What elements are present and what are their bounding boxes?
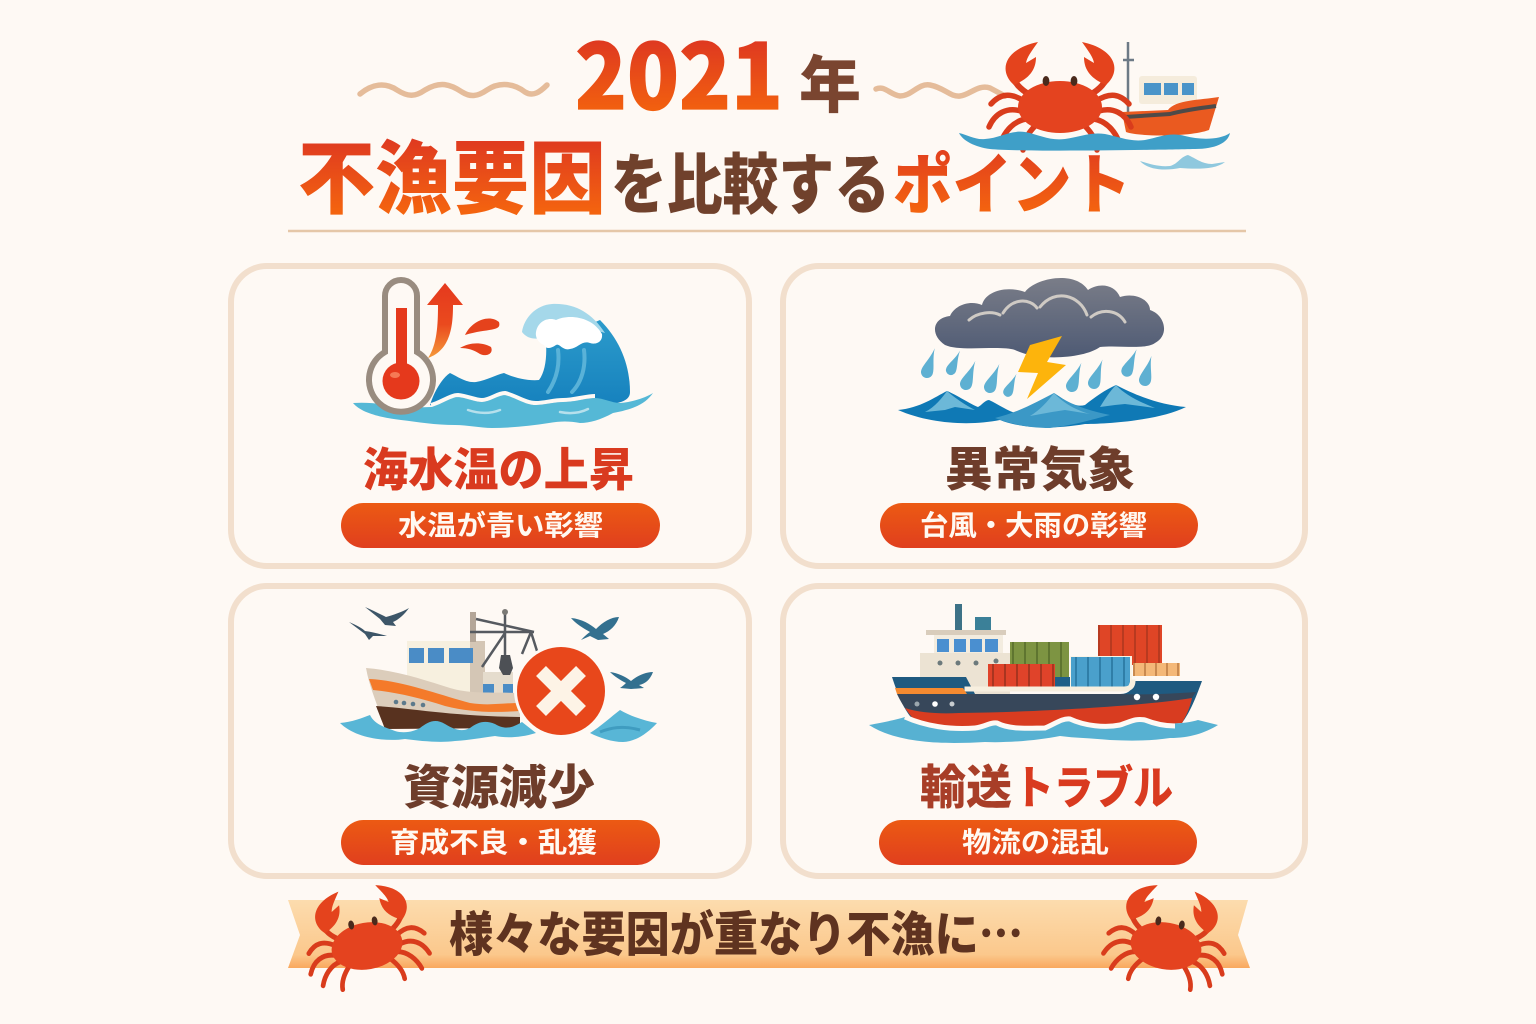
icon: ship water [869,717,1218,743]
heading: 海水温の上昇 [363,434,634,500]
boat cabin [1139,76,1197,104]
icon: cross mark [514,644,608,738]
icon: rain [919,346,1157,398]
banner [288,878,1250,995]
heading: 異常気象 [945,431,1135,500]
card [231,266,749,566]
pill text: 物流の混乱 [962,821,1109,861]
title: year kanji: 年 [799,35,861,125]
panel: sea temperature [231,266,749,566]
icon: water [340,710,657,742]
heading: 資源減少 [403,749,595,818]
icon: wave [430,304,630,410]
title: causes: 不漁要因 [298,115,606,231]
heading kanji: 輸送 [920,749,1012,818]
boat windows [1144,83,1194,95]
title block [298,5,1131,231]
ribbon [288,900,1250,968]
title: year: 2021 [575,5,783,135]
pill text: 水温が青い彰響 [398,504,603,544]
icon: left crab [297,878,433,995]
icon: stormy sea [898,385,1186,428]
pill text: 育成不良・乱獲 [390,821,597,861]
icon: lightning [1018,336,1066,399]
panel: extreme weather [783,266,1305,566]
small wave [1140,155,1225,170]
decoration: right wave [876,85,1005,96]
icon: front water [353,393,653,428]
icon: cargo ship [892,604,1202,729]
pill [879,820,1197,865]
icon: fishing boat [366,609,537,729]
icon: birds [349,607,653,689]
boat mast [1123,42,1134,112]
boat hull [1122,97,1219,136]
icon: thermometer [369,280,433,412]
pill [341,503,660,548]
pill [880,503,1198,548]
title: compare: を比較する [611,132,890,228]
crab [989,42,1131,150]
banner text: 様々な要因が重なり不漁に… [449,895,1023,965]
water [959,132,1230,151]
decoration: left wave [360,84,547,96]
icon: storm cloud [935,278,1164,357]
pill [341,820,660,865]
card [231,586,749,876]
card [783,266,1305,566]
title: points: ポイント [893,132,1131,228]
heading [920,749,1173,818]
heading katakana: トラブル [1014,752,1173,818]
panel: resource decline [231,586,749,876]
panel: transport trouble [783,586,1305,876]
pill text: 台風・大雨の彰響 [920,504,1147,544]
icon: crab and boat [959,42,1230,170]
card [783,586,1305,876]
icon: rising arrow [427,283,463,358]
divider [288,230,1246,232]
icon: right crab [1100,878,1236,995]
icon: heat swooshes [460,318,499,355]
